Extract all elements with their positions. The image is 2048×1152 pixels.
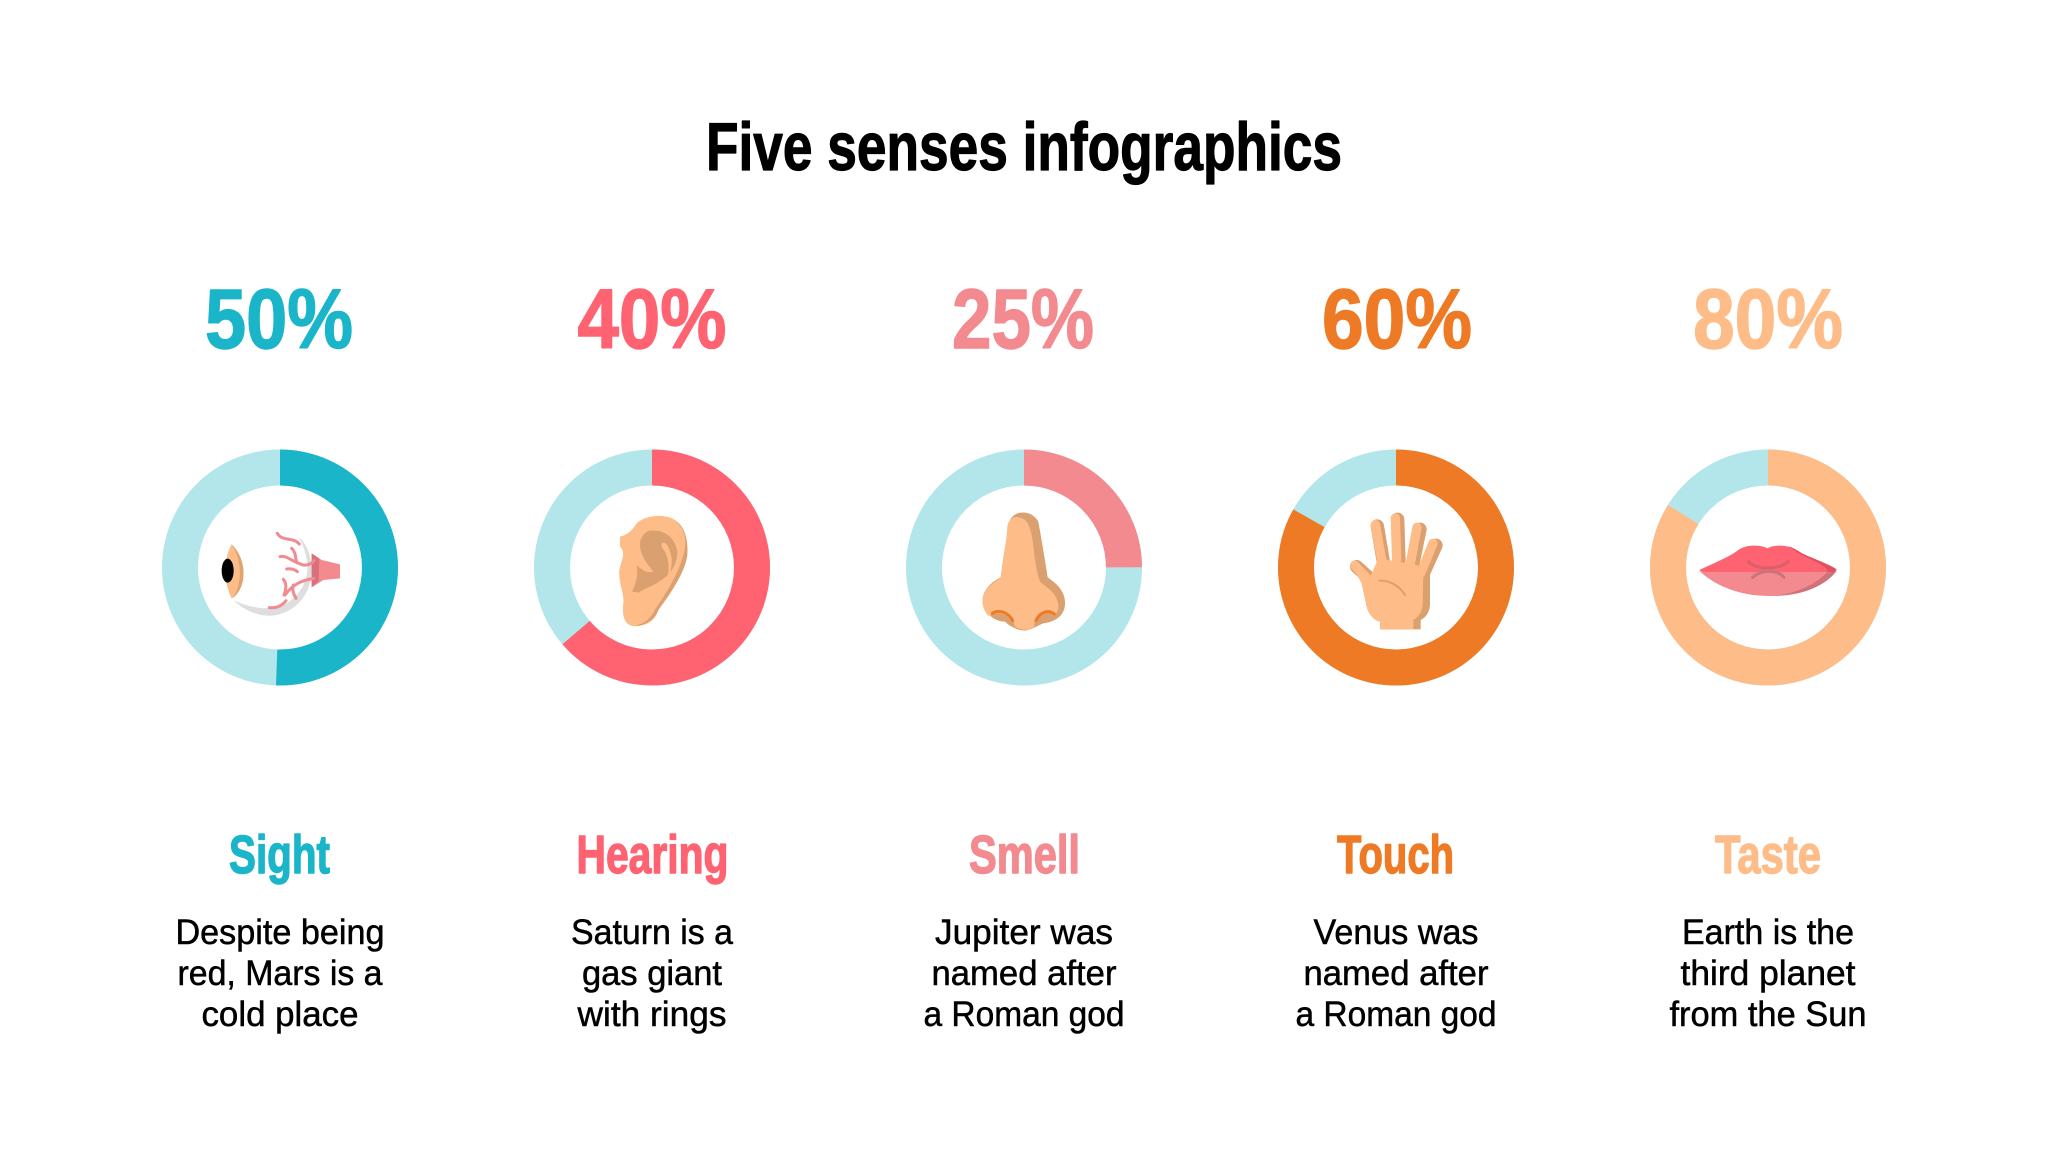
description: touch: named after — [1304, 954, 1489, 993]
title: Five senses infographics — [706, 109, 1342, 185]
heading: hearing: Hearing — [576, 825, 728, 885]
donut chart: touch — [1296, 468, 1496, 668]
description: sight — [176, 913, 384, 1034]
donut chart: smell — [924, 468, 1124, 668]
description: touch — [1296, 913, 1496, 1034]
heading: touch: Touch — [1337, 825, 1454, 885]
column: smell — [924, 272, 1124, 1034]
column: touch — [1296, 272, 1496, 1034]
description: smell — [924, 913, 1124, 1034]
description: sight: cold place — [202, 995, 358, 1034]
percentage: hearing: 40% — [578, 272, 726, 366]
column: sight — [176, 272, 384, 1034]
description: taste: third planet — [1680, 954, 1856, 993]
description: smell: a Roman god — [924, 995, 1124, 1034]
icon: nose — [982, 512, 1065, 631]
donut chart: hearing — [552, 468, 752, 668]
description: taste — [1670, 913, 1866, 1034]
description: touch: a Roman god — [1296, 995, 1496, 1034]
heading: smell: Smell — [969, 825, 1080, 885]
description: hearing: gas giant — [582, 954, 722, 993]
icon: hand — [1354, 518, 1436, 629]
description: hearing — [571, 913, 734, 1034]
description: smell: named after — [932, 954, 1117, 993]
percentage: sight: 50% — [205, 272, 353, 366]
description: taste: Earth is the — [1682, 913, 1854, 952]
description: hearing: with rings — [576, 995, 726, 1034]
heading: taste: Taste — [1715, 825, 1821, 885]
description: sight: Despite being — [176, 913, 384, 952]
icon: lips — [1699, 546, 1837, 596]
percentage: smell: 25% — [952, 272, 1094, 366]
description: hearing: Saturn is a — [571, 913, 734, 952]
donut chart: sight — [180, 468, 380, 668]
percentage: taste: 80% — [1693, 272, 1843, 366]
heading: sight: Sight — [229, 825, 330, 885]
description: taste: from the Sun — [1670, 995, 1866, 1034]
icon: eye — [222, 533, 340, 616]
percentage: touch: 60% — [1322, 272, 1472, 366]
description: sight: red, Mars is a — [178, 954, 383, 993]
column: taste — [1668, 272, 1868, 1034]
donut chart: taste — [1668, 468, 1868, 668]
icon: ear — [619, 516, 688, 626]
description: smell: Jupiter was — [935, 913, 1113, 952]
column: hearing — [552, 272, 752, 1034]
description: touch: Venus was — [1314, 913, 1478, 952]
